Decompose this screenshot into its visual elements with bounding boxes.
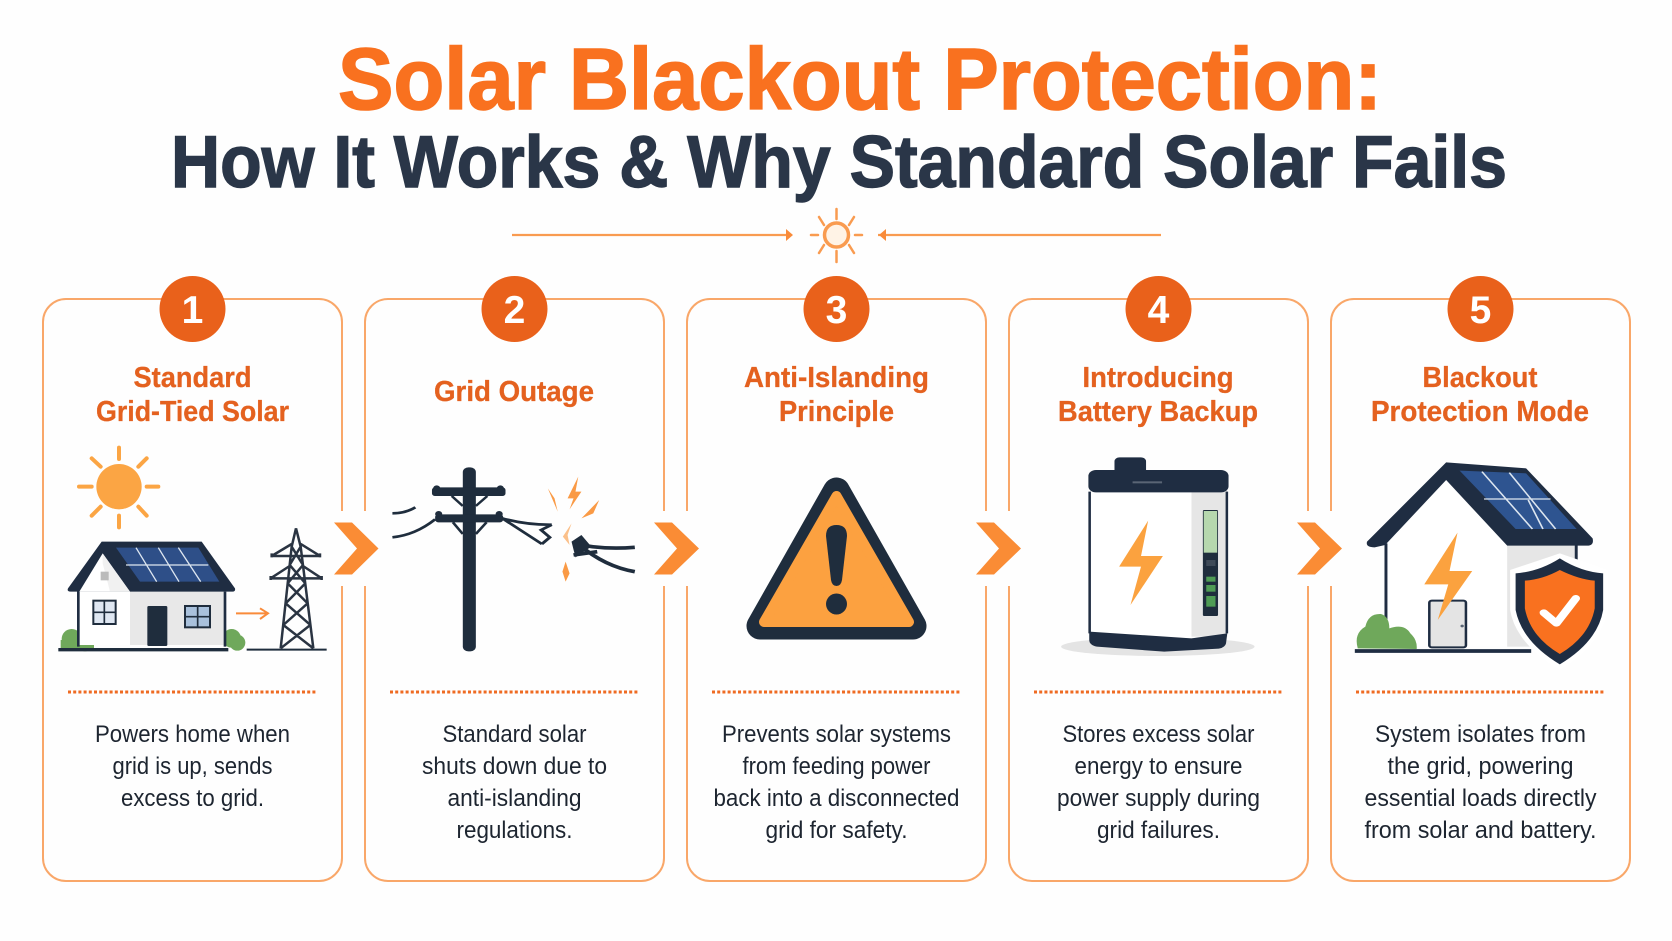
divider: [390, 690, 639, 694]
description: step 5: essential loads directly: [1364, 785, 1596, 812]
description: step 4: energy to ensure: [1074, 753, 1242, 780]
description: step 3: from feeding power: [742, 753, 930, 780]
panel: step 1: [43, 276, 342, 881]
sun divider with arrows: [512, 209, 1161, 262]
heading: step 5: [1371, 362, 1589, 428]
description: step 3: grid for safety.: [766, 817, 908, 844]
title: Solar Blackout Protection:: [338, 31, 1382, 128]
icon: utility pole with broken wires: [392, 467, 635, 651]
icon: sun, house and pylon: [58, 448, 327, 651]
description: step 2: Standard solar: [442, 721, 587, 748]
badge 1: 1: [182, 289, 203, 332]
subtitle: How It Works & Why Standard Solar Fails: [171, 122, 1507, 203]
heading: step 2: Grid Outage: [434, 376, 594, 408]
panel: step 3: [687, 276, 986, 881]
description: step 3: Prevents solar systems: [722, 721, 951, 748]
heading: step 3: Anti-Islanding: [744, 362, 929, 394]
badge 1: [160, 276, 226, 342]
heading: step 1: [96, 362, 289, 428]
badge 5: [1448, 276, 1514, 342]
panel: step 2: [365, 276, 664, 881]
divider: [712, 690, 961, 694]
description: step 4: Stores excess solar: [1062, 721, 1254, 748]
heading: step 3: [744, 362, 929, 428]
heading: step 3: Principle: [779, 396, 894, 428]
description: step 4: [1057, 721, 1260, 844]
description: step 2: [422, 721, 607, 844]
description: step 2: regulations.: [456, 817, 572, 844]
panel: step 5: [1331, 276, 1630, 881]
description: step 1: Powers home when: [95, 721, 290, 748]
description: step 5: from solar and battery.: [1364, 817, 1596, 844]
badge 2: [482, 276, 548, 342]
description: step 2: anti-islanding: [448, 785, 582, 812]
icon: battery: [1061, 457, 1255, 656]
icon: protected house: [1355, 462, 1608, 670]
heading: step 4: Introducing: [1082, 362, 1234, 394]
panel: step 4: [1009, 276, 1308, 881]
description: step 5: [1364, 721, 1596, 844]
arrow: step 4 to 5: [1293, 511, 1348, 586]
description: step 1: grid is up, sends: [112, 753, 272, 780]
heading: step 1: Grid-Tied Solar: [96, 396, 289, 428]
description: step 2: shuts down due to: [422, 753, 607, 780]
description: step 5: System isolates from: [1375, 721, 1586, 748]
description: step 3: [714, 721, 960, 844]
heading: step 1: Standard: [134, 362, 252, 394]
description: step 4: grid failures.: [1097, 817, 1220, 844]
description: step 3: back into a disconnected: [714, 785, 960, 812]
badge 4: 4: [1148, 289, 1170, 332]
description: step 4: power supply during: [1057, 785, 1260, 812]
description: step 1: [95, 721, 290, 812]
icon: warning triangle: [760, 491, 913, 626]
arrow: step 2 to 3: [650, 511, 705, 586]
divider: [1034, 690, 1283, 694]
description: step 5: the grid, powering: [1388, 753, 1574, 780]
heading: step 4: Battery Backup: [1058, 396, 1258, 428]
divider: [68, 690, 317, 694]
arrow: step 1 to 2: [330, 511, 385, 586]
badge 2: 2: [504, 289, 525, 332]
badge 4: [1126, 276, 1192, 342]
divider: [1356, 690, 1605, 694]
badge 5: 5: [1470, 289, 1491, 332]
arrow: step 3 to 4: [972, 511, 1027, 586]
badge 3: 3: [826, 289, 847, 332]
heading: step 5: Blackout: [1422, 362, 1538, 394]
description: step 1: excess to grid.: [121, 785, 264, 812]
badge 3: [804, 276, 870, 342]
heading: step 5: Protection Mode: [1371, 396, 1589, 428]
heading: step 4: [1058, 362, 1258, 428]
